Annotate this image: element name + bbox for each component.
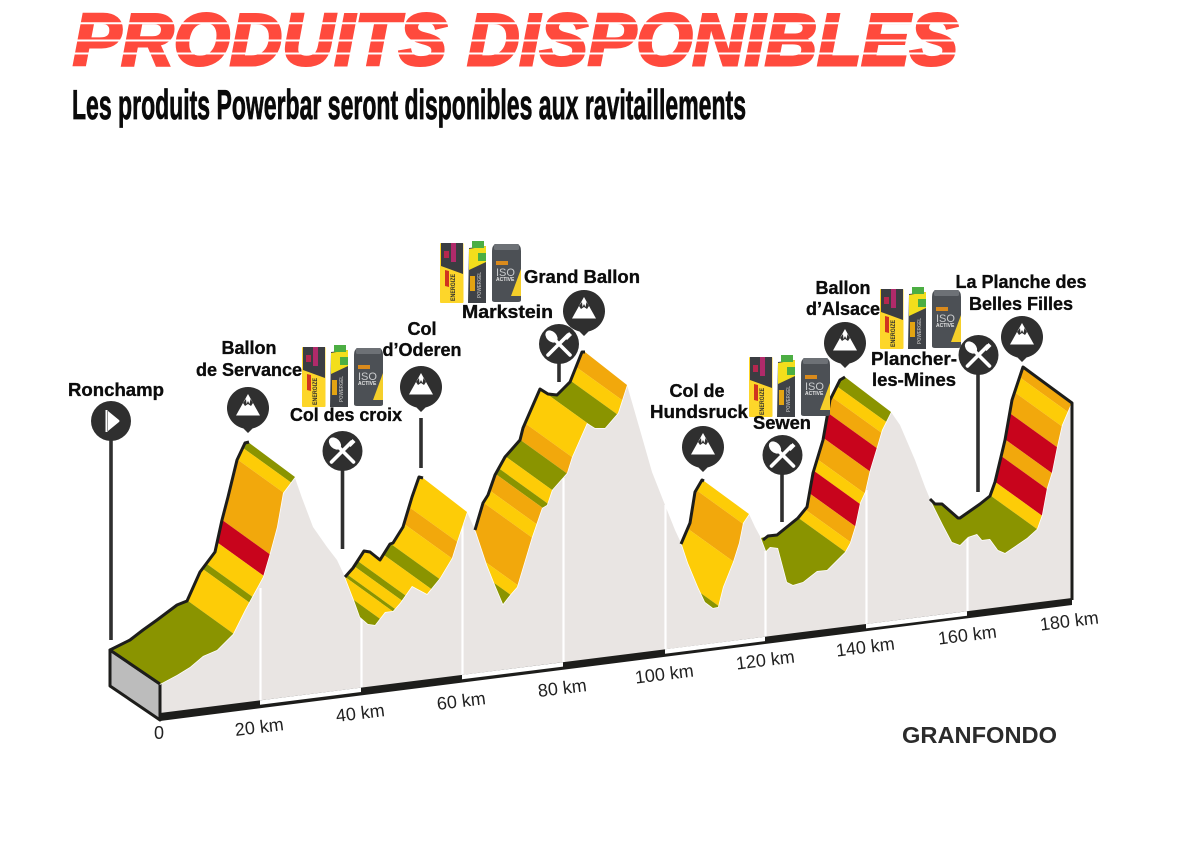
label: Col des croix: Col des croix bbox=[290, 405, 402, 425]
marker: Markstein food stop bbox=[539, 324, 579, 382]
products: Markstein bbox=[440, 241, 521, 303]
label: Ballon de Servance: Ballon bbox=[221, 338, 277, 358]
distance axis labels: 140 km bbox=[835, 634, 896, 661]
20 km distance dividers bbox=[260, 478, 968, 702]
products: Sewen bbox=[749, 355, 830, 417]
label: Plancher-les-Mines: Plancher- bbox=[871, 349, 957, 369]
base strip bbox=[160, 598, 1072, 721]
distance axis labels: 0 bbox=[154, 723, 164, 743]
marker: Col des croix food stop bbox=[322, 431, 362, 549]
label: Ballon d'Alsace: d’Alsace bbox=[806, 299, 880, 319]
climb: Ballon d'Alsace bbox=[760, 376, 892, 586]
label: Col d'Oderen: Col bbox=[408, 319, 436, 339]
distance axis labels: 160 km bbox=[937, 622, 998, 649]
label: Markstein: Markstein bbox=[462, 302, 553, 322]
label: Plancher-les-Mines: les-Mines bbox=[872, 370, 956, 390]
marker: Col d'Oderen pin bbox=[400, 366, 442, 468]
distance axis labels bbox=[154, 608, 1100, 743]
label: Col de Hundsruck: Col de bbox=[669, 381, 725, 401]
climb: La Planche des Belles Filles bbox=[929, 366, 1074, 600]
climb: Col de Hundsruck bbox=[680, 478, 750, 609]
distance axis labels: 60 km bbox=[436, 688, 487, 714]
climb: Ballon de Servance bbox=[108, 440, 295, 685]
marker: Ronchamp start bbox=[91, 401, 131, 640]
products: Plancher-les-Mines bbox=[880, 287, 961, 349]
products: Col des croix bbox=[302, 345, 383, 407]
icon: mountain pin Ballon de Servance bbox=[227, 387, 269, 433]
label: Ballon de Servance: de Servance bbox=[196, 360, 302, 380]
distance axis labels: 100 km bbox=[634, 661, 695, 688]
title: PRODUITS DISPONIBLES bbox=[73, 0, 958, 81]
label: La Planche des Belles Filles: Belles Filles bbox=[969, 294, 1073, 314]
side face bbox=[110, 650, 160, 720]
marker: Plancher-les-Mines food stop bbox=[958, 335, 998, 492]
label: Ballon d'Alsace: Ballon bbox=[815, 278, 871, 298]
race label: GRANFONDO: GRANFONDO bbox=[902, 722, 1057, 748]
label: Sewen: Sewen bbox=[753, 413, 811, 433]
label: Col d'Oderen: d’Oderen bbox=[382, 340, 462, 360]
label: La Planche des Belles Filles: La Planche des bbox=[955, 272, 1087, 292]
climb: Col d'Oderen bbox=[344, 476, 468, 626]
label: Col de Hundsruck: Hundsruck bbox=[650, 402, 749, 422]
distance axis labels: 40 km bbox=[335, 700, 386, 726]
climb: Grand Ballon bbox=[474, 350, 628, 606]
terrain silhouette bbox=[160, 385, 1072, 716]
label: Grand Ballon: Grand Ballon bbox=[524, 267, 640, 287]
distance axis labels: 120 km bbox=[735, 647, 796, 674]
label: Ronchamp: Ronchamp bbox=[68, 380, 164, 400]
distance axis labels: 80 km bbox=[537, 675, 588, 701]
distance axis labels: 20 km bbox=[234, 714, 285, 740]
marker: Sewen food stop bbox=[762, 435, 802, 522]
icon: mountain pin La Planche des Belles Filles bbox=[1001, 316, 1043, 362]
distance axis labels: 180 km bbox=[1039, 608, 1100, 635]
icon: mountain pin Grand Ballon bbox=[563, 290, 605, 336]
icon: mountain pin Col de Hundsruck bbox=[682, 426, 724, 472]
elevation profile chart bbox=[108, 350, 1074, 722]
icon: mountain pin Ballon d'Alsace bbox=[824, 322, 866, 368]
